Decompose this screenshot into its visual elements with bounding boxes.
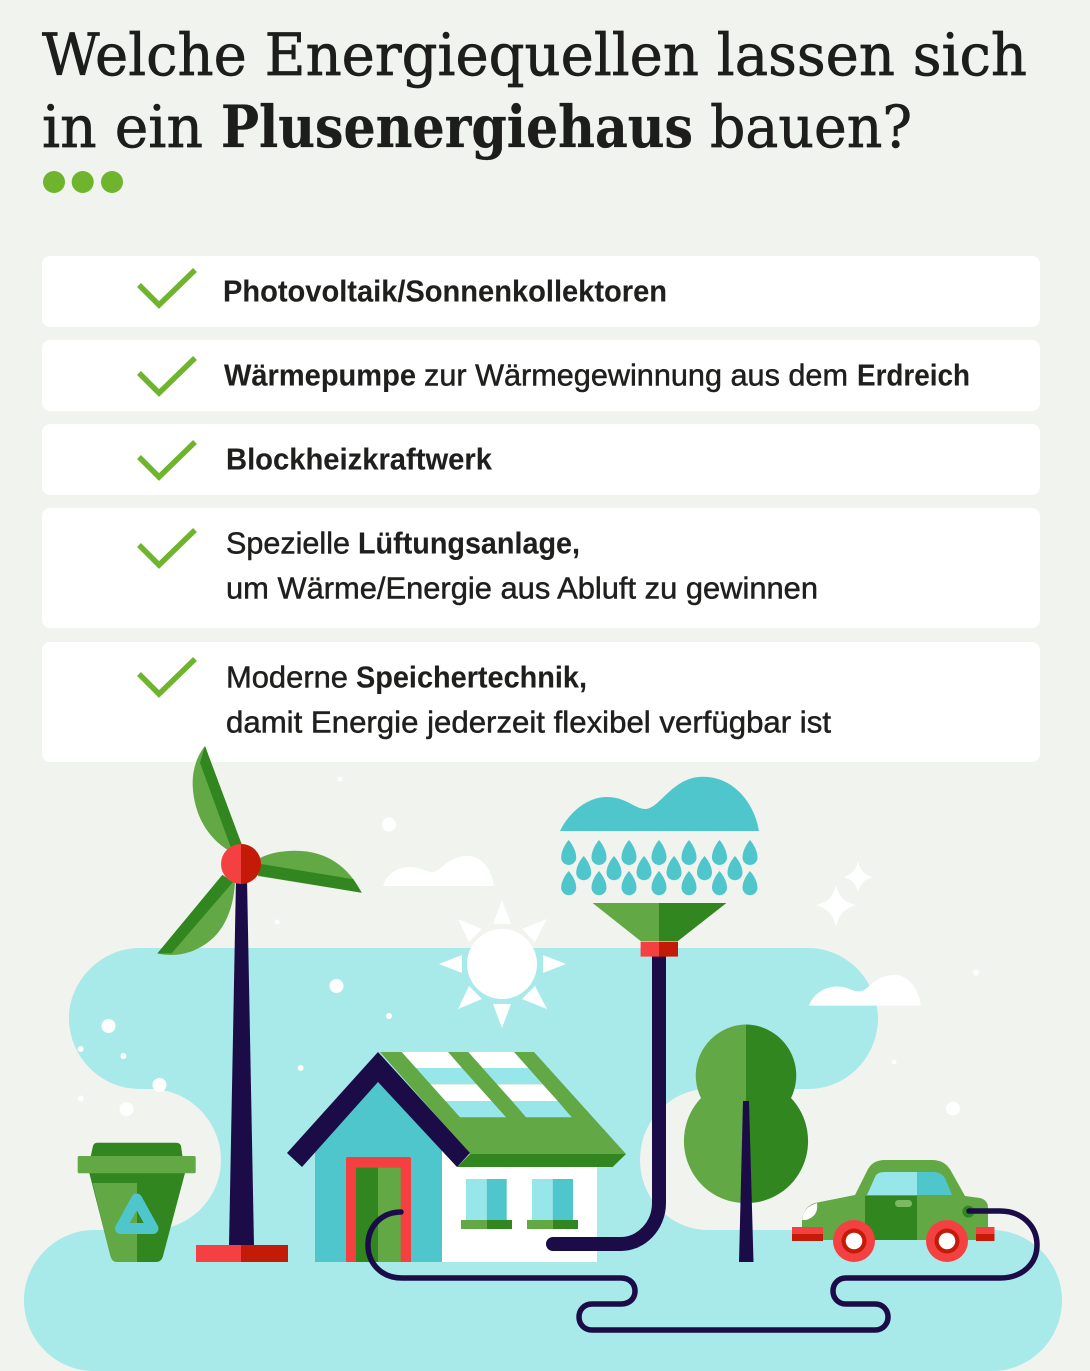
title: in ein — [42, 93, 203, 161]
three green dots — [43, 171, 123, 193]
panel: Wärmepumpe — [42, 340, 1040, 411]
gable roof edge — [287, 1052, 470, 1167]
window right — [527, 1179, 578, 1229]
icon: electric car — [792, 1160, 994, 1262]
icon: recycling bin — [78, 1143, 196, 1262]
roof — [380, 1052, 626, 1154]
icon: rain cloud — [560, 777, 759, 831]
panel: Speichertechnik: Speichertechnik, — [356, 660, 587, 694]
window left — [461, 1179, 512, 1229]
icon: sparkles — [816, 861, 872, 927]
panel: Wärmepumpe: zur Wärmegewinnung aus dem — [424, 358, 848, 392]
decorative white dots — [78, 776, 979, 1116]
solar panels — [402, 1052, 572, 1117]
icon: sun — [439, 900, 566, 1028]
panel: Lüftungsanlage — [42, 508, 1040, 628]
panel: Wärmepumpe: Erdreich — [857, 358, 970, 392]
panel: Speichertechnik: Moderne — [226, 660, 348, 694]
icon: white cloud right — [809, 975, 921, 1006]
icon: tree — [684, 1024, 808, 1262]
panel: Blockheizkraftwerk — [42, 424, 1040, 495]
background landscape shape — [24, 948, 1062, 1371]
title: Welche Energiequellen lassen sich — [42, 21, 1027, 89]
door — [346, 1157, 411, 1262]
panel: Speichertechnik: damit Energie jederzeit flexibel verfügbar ist — [226, 704, 831, 740]
panel: Wärmepumpe: Wärmepumpe — [224, 358, 416, 392]
panel: Lüftungsanlage: um Wärme/Energie aus Abluft zu gewinnen — [226, 570, 818, 606]
panel: Blockheizkraftwerk: Blockheizkraftwerk — [226, 442, 493, 476]
cable from house to car — [368, 1211, 1037, 1330]
panel: Lüftungsanlage: Lüftungsanlage, — [358, 526, 580, 560]
panel: Speichertechnik — [42, 642, 1040, 762]
panel: Lüftungsanlage: Spezielle — [226, 526, 350, 560]
title: Plusenergiehaus — [221, 93, 693, 161]
icon: wind turbine — [157, 746, 362, 1262]
title — [42, 21, 1027, 161]
icon: rain funnel with pipe — [553, 903, 726, 1244]
icon: house — [287, 1052, 626, 1262]
icon: rain drops — [561, 840, 758, 895]
panel: Photovoltaik: Photovoltaik/Sonnenkollektoren — [223, 274, 667, 308]
title: bauen? — [710, 93, 912, 161]
icon: white cloud left — [383, 856, 494, 886]
panel: Photovoltaik — [42, 256, 1040, 327]
